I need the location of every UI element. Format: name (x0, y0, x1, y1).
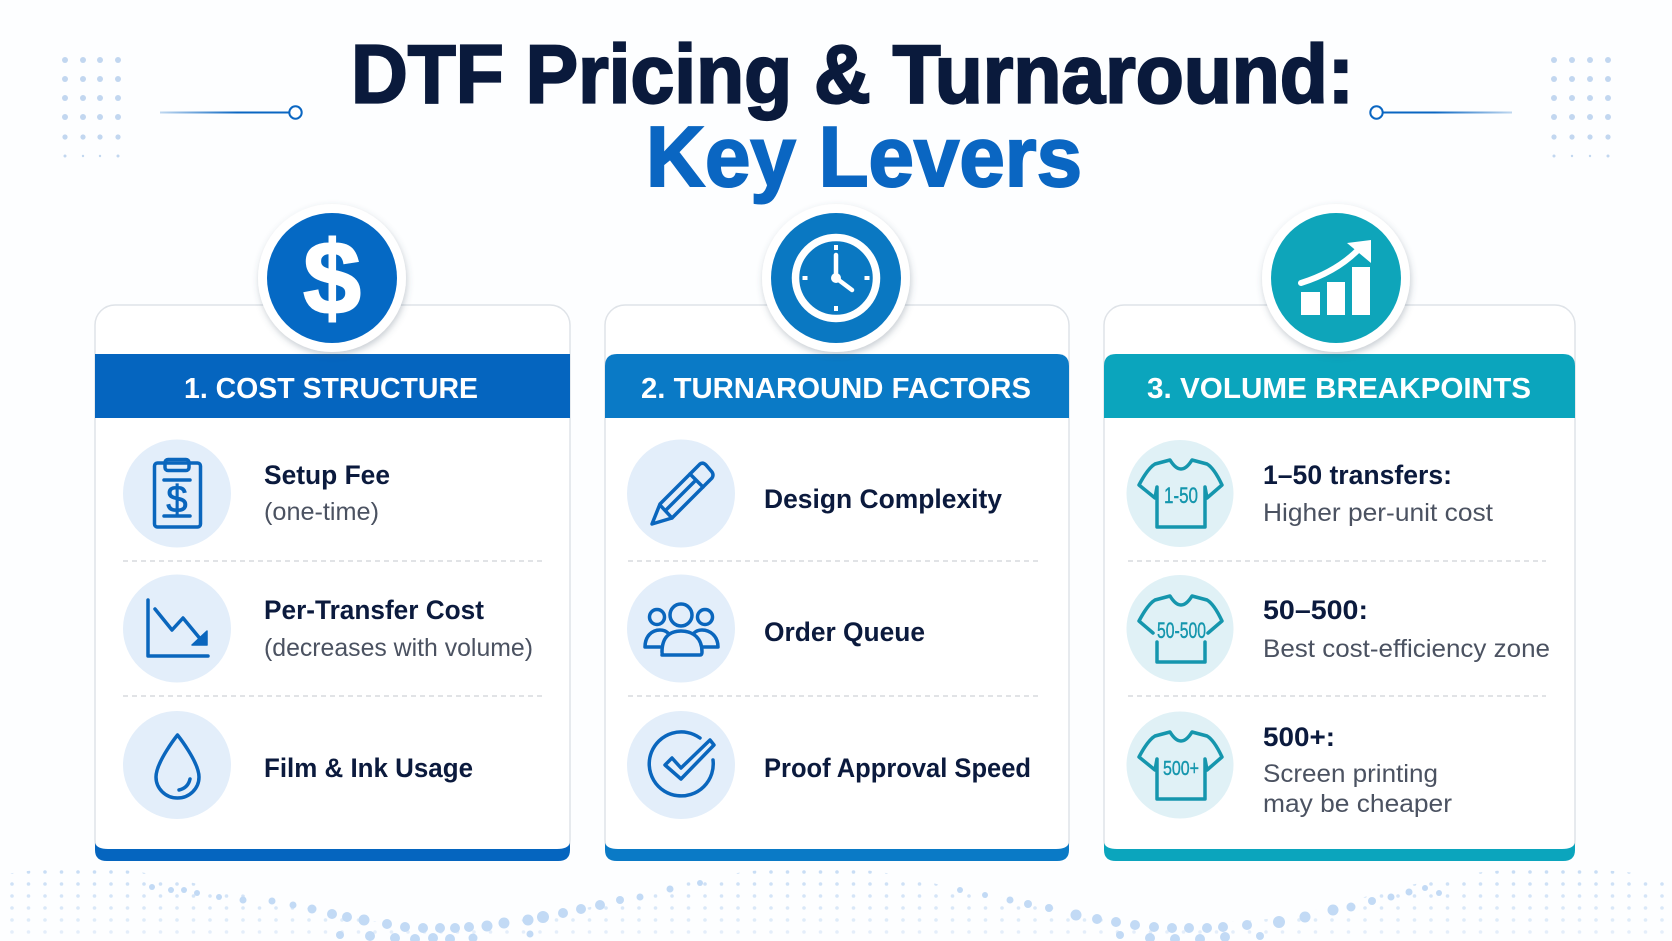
title: Key Levers (646, 110, 1082, 205)
title (351, 28, 1354, 205)
icon: clipboard with dollar (123, 440, 231, 548)
text: 500+: may be cheaper (1263, 790, 1452, 818)
panel: turnaround factors (605, 204, 1069, 861)
text: 50-500: Best cost-efficiency zone (1263, 635, 1550, 663)
badge: dollar sign (258, 204, 406, 352)
icon: t-shirt 50-500 (1126, 575, 1234, 682)
bottom wave of dots (10, 870, 1664, 941)
footer bar: cost structure (95, 843, 570, 861)
icon: clipboard with dollar: $ (166, 479, 188, 521)
text: 500+: 500+: (1263, 722, 1335, 752)
title: DTF Pricing & Turnaround: (351, 28, 1354, 120)
header: volume breakpoints: 3. VOLUME BREAKPOINTS (1147, 373, 1531, 405)
right title connector (1370, 106, 1512, 119)
badge: clock (762, 204, 910, 352)
icon: check circle (627, 711, 735, 819)
text: design complexity: Design Complexity (764, 484, 1002, 514)
right dot grid decoration (1551, 57, 1611, 158)
text: per-transfer cost (264, 595, 533, 662)
icon: t-shirt 1-50 (1126, 440, 1234, 547)
icon: people group (627, 574, 735, 682)
footer bar: turnaround factors (605, 843, 1069, 861)
header: turnaround factors: 2. TURNAROUND FACTORS (641, 373, 1031, 405)
text: proof approval speed: Proof Approval Speed (764, 753, 1031, 783)
text: per-transfer cost: Per-Transfer Cost (264, 595, 484, 625)
header: turnaround factors (605, 354, 1069, 418)
text: 500+: Screen printing (1263, 760, 1438, 788)
text: 500+ (1263, 722, 1452, 818)
panel: volume breakpoints (1104, 204, 1575, 861)
text: 50-500: 50–500: (1263, 595, 1368, 625)
icon: t-shirt 50-500: 50-500 (1157, 618, 1206, 643)
text: 1-50 transfers: 1–50 transfers: (1263, 460, 1452, 490)
left dot grid decoration (62, 57, 121, 158)
left title connector (160, 106, 302, 119)
icon: declining chart (123, 574, 231, 682)
icon: t-shirt 500+ (1126, 712, 1234, 818)
text: per-transfer cost: (decreases with volume) (264, 634, 533, 662)
text: 1-50 transfers (1263, 460, 1493, 527)
icon: ink drop (123, 711, 231, 819)
text: order queue: Order Queue (764, 617, 925, 647)
text: setup fee: (one-time) (264, 498, 379, 526)
header: cost structure (95, 354, 570, 418)
header: volume breakpoints (1104, 354, 1575, 418)
icon: t-shirt 500+: 500+ (1163, 758, 1199, 780)
panel: cost structure (95, 204, 570, 861)
text: setup fee (264, 460, 390, 526)
badge: dollar sign: $ (303, 221, 361, 337)
text: 50-500 (1263, 595, 1550, 663)
text: setup fee: Setup Fee (264, 460, 390, 490)
icon: t-shirt 1-50: 1-50 (1164, 483, 1198, 508)
header: cost structure: 1. COST STRUCTURE (184, 373, 478, 405)
footer bar: volume breakpoints (1104, 843, 1575, 861)
icon: pencil (627, 440, 735, 548)
text: 1-50 transfers: Higher per-unit cost (1263, 499, 1493, 527)
text: film and ink usage: Film & Ink Usage (264, 753, 473, 783)
badge: growth chart (1262, 204, 1410, 352)
